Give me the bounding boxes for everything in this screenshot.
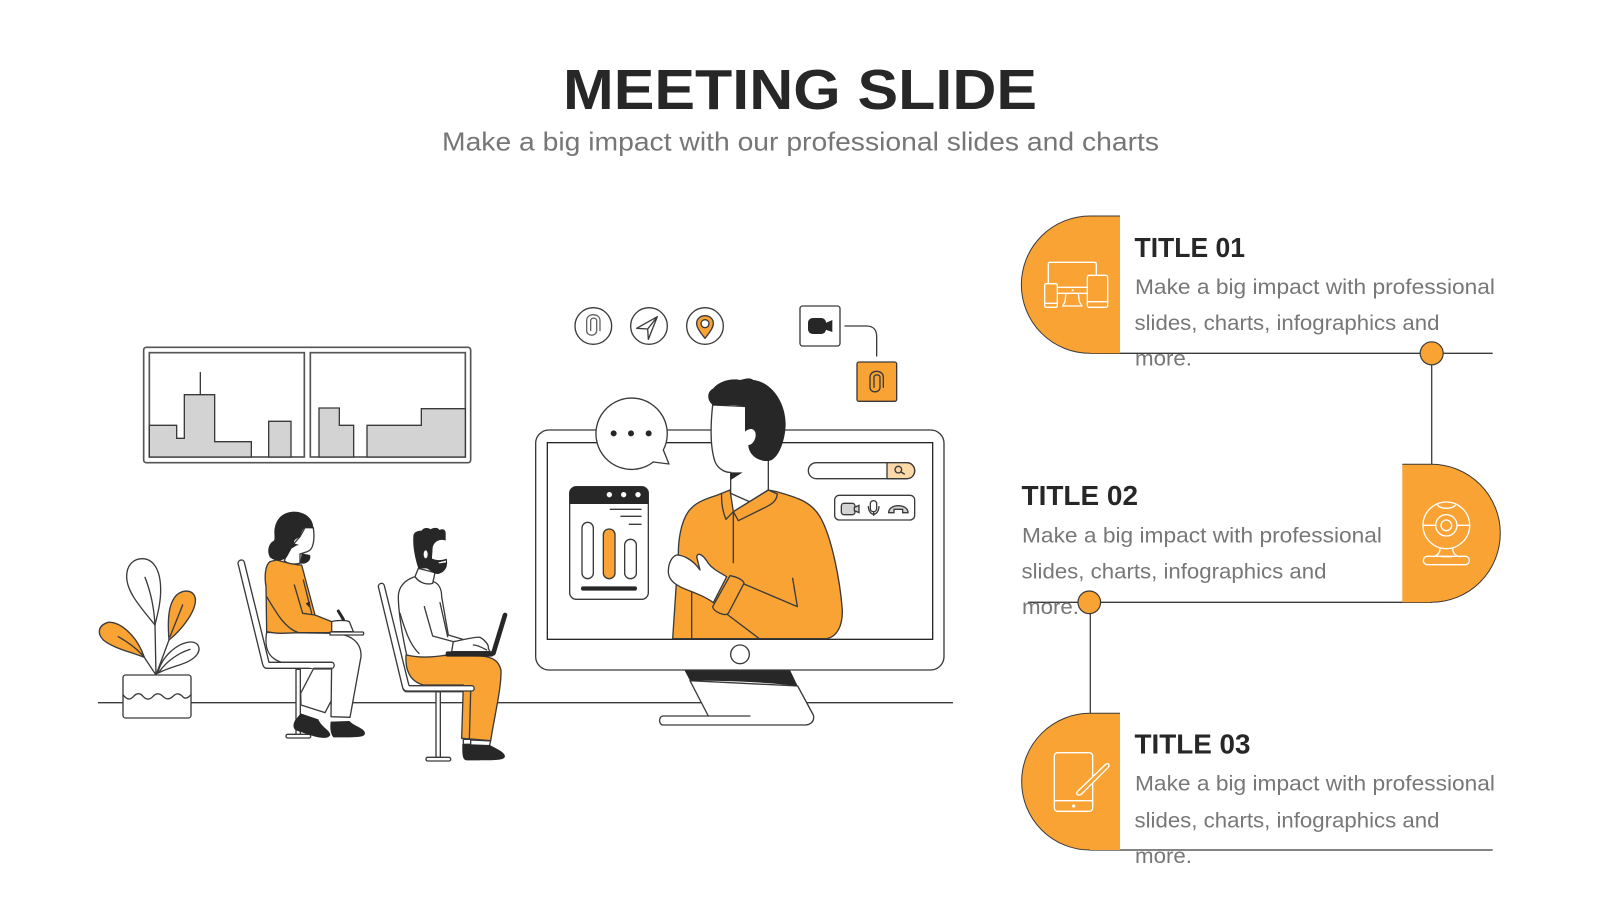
body 03: Make a big impact with professional [1135,773,1495,796]
orange tab 02 [1402,464,1500,602]
panel: item 03 [1022,713,1501,868]
heading 02: TITLE 02 [1022,480,1138,511]
icon: devices [1045,262,1108,307]
speech bubble [596,398,669,469]
woman seated taking notes [238,512,365,738]
icon: paperclip circle [575,308,612,344]
wall window with skyline [144,347,471,463]
illustration: video call monitor [536,306,944,725]
icon: webcam [1423,502,1470,565]
node 01 [1420,342,1443,365]
monitor body [536,430,944,670]
chart card [570,487,648,599]
panel: item 01 [1021,216,1501,371]
orange tab 01 [1021,216,1120,353]
node 02 [1078,591,1101,614]
potted plant [99,559,199,718]
heading 01: TITLE 01 [1134,232,1245,263]
search bar [808,463,915,479]
connector lines [1028,353,1493,850]
body 03: more. [1135,845,1192,868]
body 01: slides, charts, infographics and [1134,312,1440,335]
call controls [835,495,915,520]
heading 03: TITLE 03 [1134,728,1250,759]
body 01: Make a big impact with professional [1135,276,1495,299]
icon: send circle [631,308,667,344]
panel: item 02 [1022,464,1500,619]
body 03: slides, charts, infographics and [1134,809,1440,832]
body 02: more. [1022,596,1079,619]
floor line [98,702,953,704]
body 02: Make a big impact with professional [1022,524,1382,547]
body 02: slides, charts, infographics and [1022,560,1326,583]
monitor stand [660,670,814,725]
icon: tablet and stylus [1054,753,1109,811]
man seated with laptop [378,528,505,761]
icon: location pin circle [687,308,723,344]
illustration: office scene [99,347,505,761]
title: MEETING SLIDE [563,58,1037,122]
presenter [668,378,842,639]
icon: video camera box [800,306,840,346]
connector arrow [845,326,877,356]
body 01: more. [1135,348,1192,371]
subtitle: Make a big impact with our professional slides and charts [442,126,1159,156]
icon: orange paperclip box [857,362,897,401]
orange tab 03 [1022,713,1120,850]
